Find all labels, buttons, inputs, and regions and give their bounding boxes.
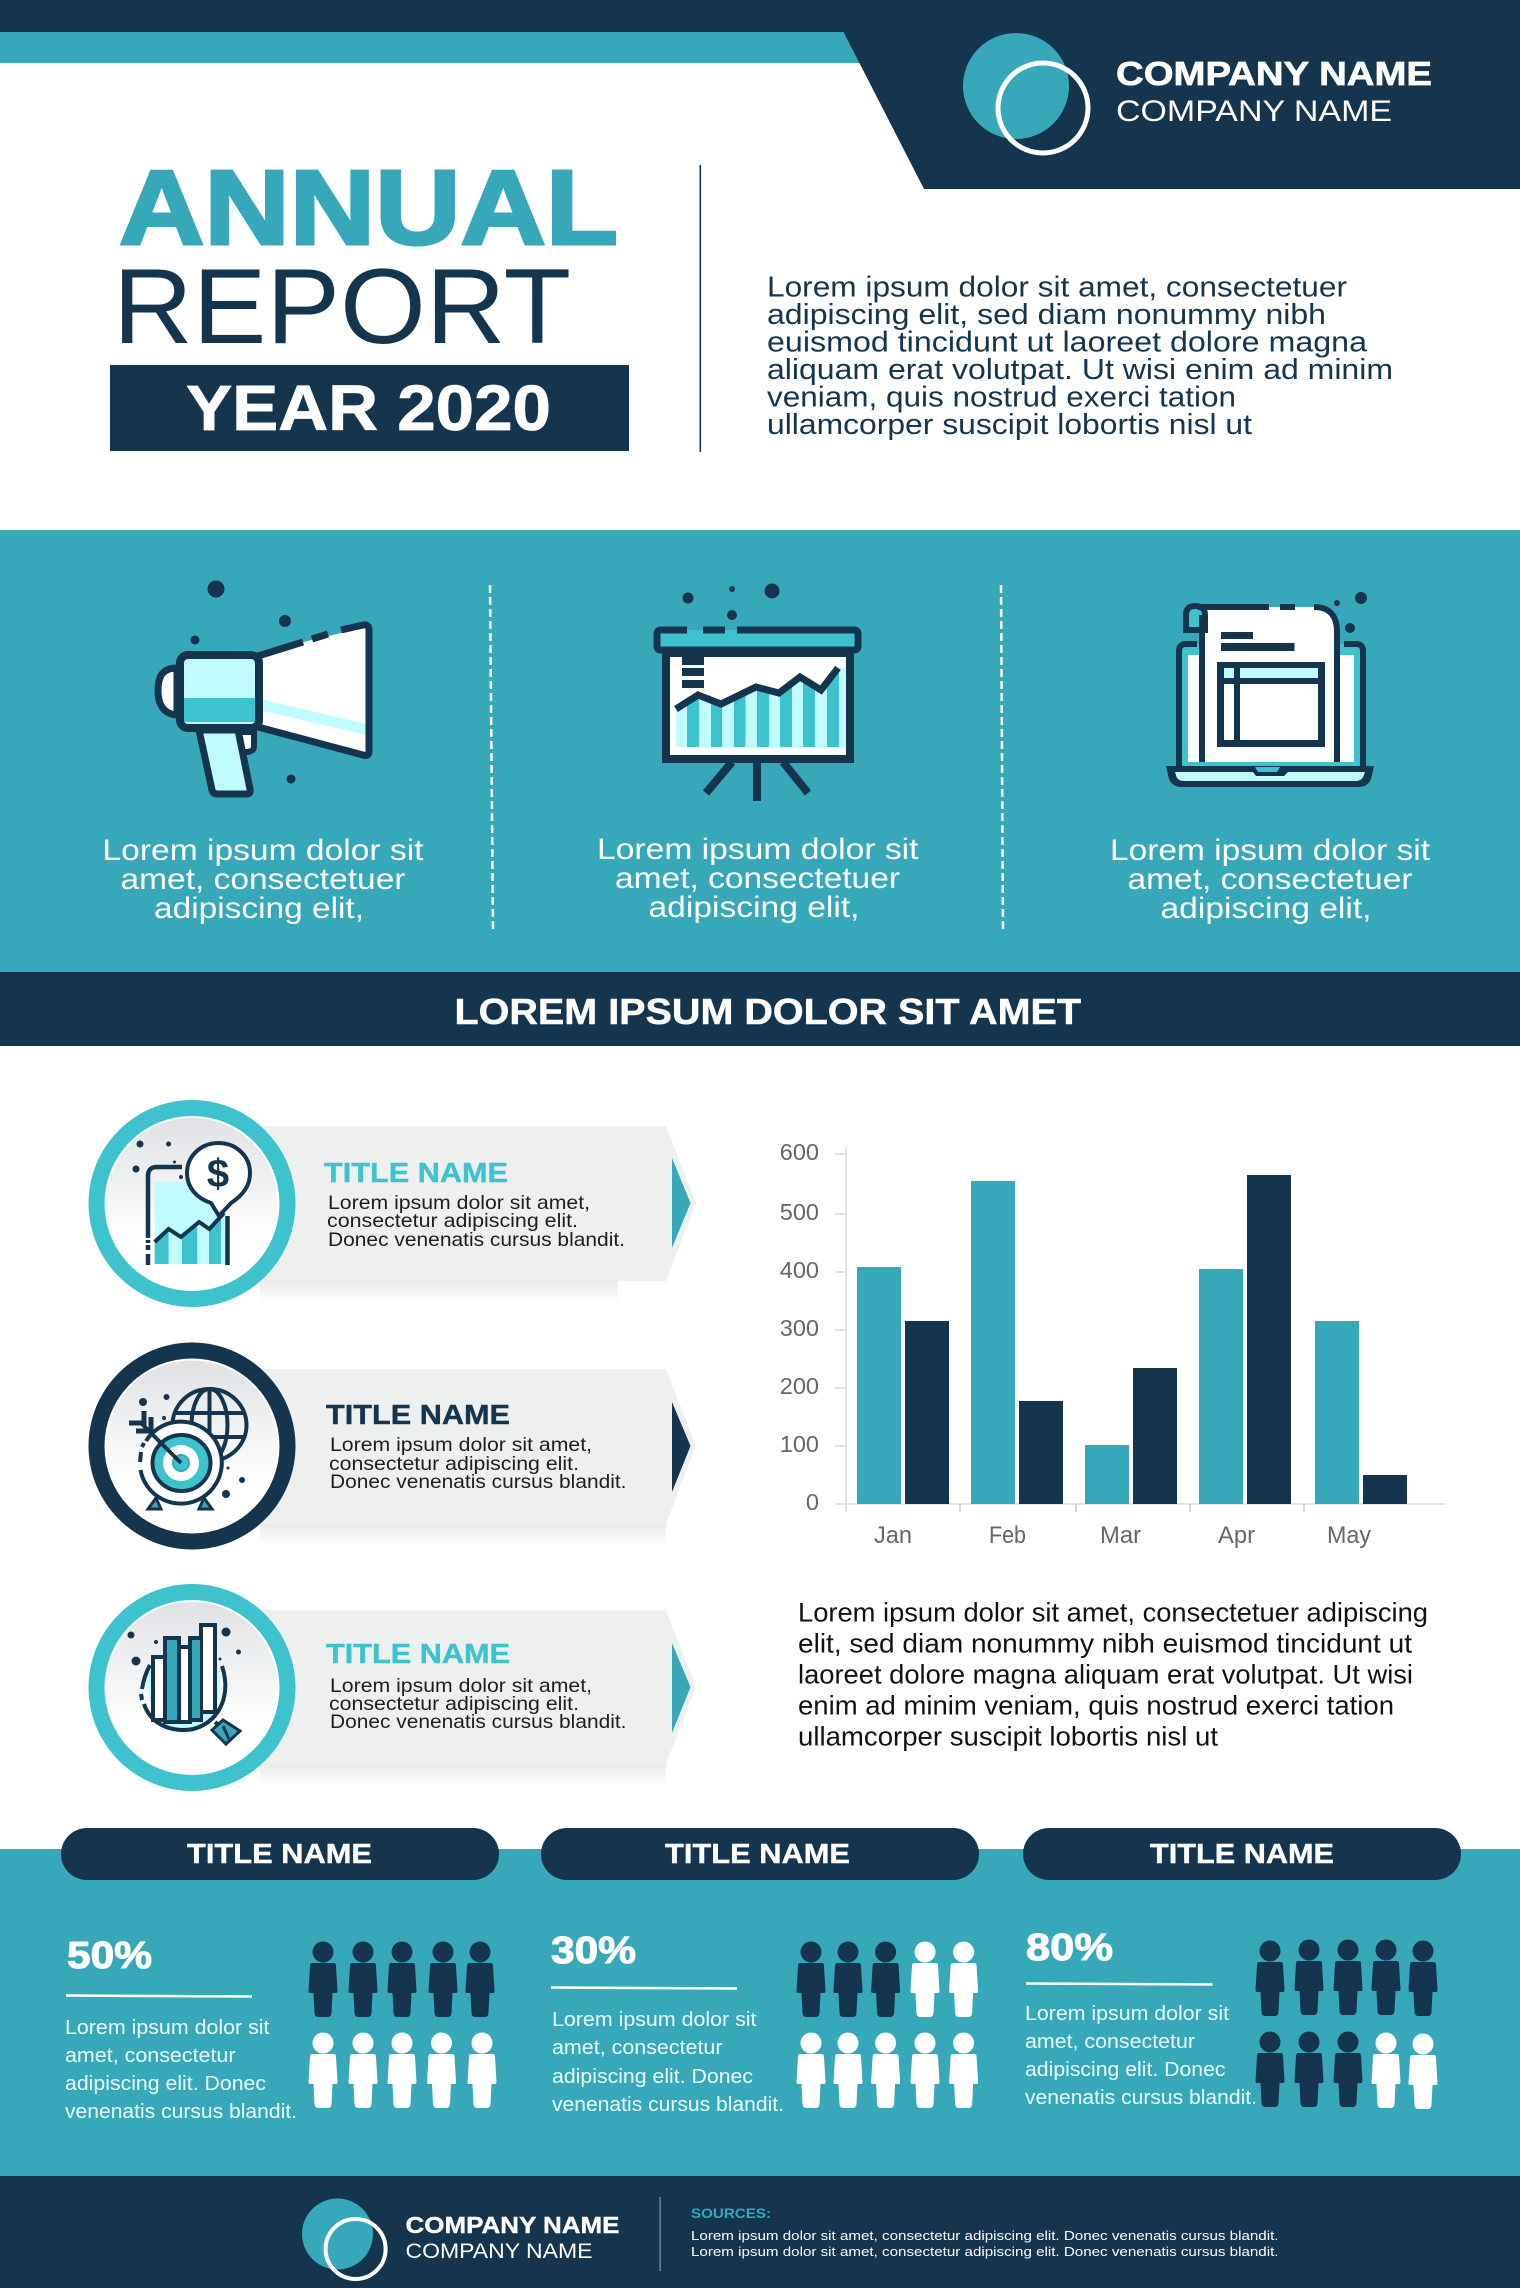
footer company name: COMPANY NAME xyxy=(406,2240,592,2263)
stat column 2: Lorem ipsum dolor sit xyxy=(552,2009,757,2031)
row 3 text: Lorem ipsum dolor sit amet, xyxy=(330,1675,592,1697)
stat column 1 xyxy=(61,1828,499,2123)
icon: company logo xyxy=(963,33,1088,153)
row 2 text: consectetur adipiscing elit. xyxy=(329,1453,579,1475)
stat column 1: venenatis cursus blandit. xyxy=(65,2101,297,2123)
row 3 text: TITLE NAME xyxy=(326,1638,510,1669)
feature captions xyxy=(102,833,1431,925)
feature captions: adipiscing elit, xyxy=(648,891,860,924)
section heading band: LOREM IPSUM DOLOR SIT AMET xyxy=(454,991,1081,1032)
title: YEAR 2020 xyxy=(186,372,551,444)
sources: SOURCES: xyxy=(691,2205,771,2221)
bar chart: 500 xyxy=(780,1199,819,1225)
icon: footer logo xyxy=(302,2198,386,2279)
stat column 3: adipiscing elit. Donec xyxy=(1025,2059,1226,2081)
title: ANNUAL xyxy=(119,149,618,267)
stat column 2: adipiscing elit. Donec xyxy=(552,2066,753,2088)
icon: target and globe xyxy=(129,1389,246,1509)
title xyxy=(110,149,629,451)
header banner xyxy=(0,0,1520,189)
stat column 2: venenatis cursus blandit. xyxy=(552,2094,784,2116)
stat column 3: venenatis cursus blandit. xyxy=(1025,2087,1257,2109)
icon: phone with dollar bubble: $ xyxy=(207,1152,229,1196)
feature captions: Lorem ipsum dolor sit xyxy=(102,834,424,867)
intro paragraph: veniam, quis nostrud exerci tation xyxy=(767,382,1236,414)
panel: row 2 xyxy=(88,1342,696,1550)
feature captions: adipiscing elit, xyxy=(154,892,364,925)
bar chart: May xyxy=(1327,1522,1371,1549)
intro paragraph: aliquam erat volutpat. Ut wisi enim ad minim xyxy=(767,354,1393,386)
feature captions: amet, consectetuer xyxy=(1128,863,1413,896)
row 2 text: Lorem ipsum dolor sit amet, xyxy=(330,1434,592,1456)
sources: Lorem ipsum dolor sit amet, consectetur adipiscing elit. Donec venenatis cursus blandit. xyxy=(691,2244,1278,2259)
stat column 1: Lorem ipsum dolor sit xyxy=(65,2017,270,2039)
icon: megaphone xyxy=(158,580,369,794)
feature captions: adipiscing elit, xyxy=(1160,892,1372,925)
row 3 text: consectetur adipiscing elit. xyxy=(329,1693,579,1715)
chart description paragraph: laoreet dolore magna aliquam erat volutpat. Ut wisi xyxy=(798,1660,1413,1690)
company name: COMPANY NAME xyxy=(1116,95,1392,128)
stat column 3: 80% xyxy=(1026,1927,1113,1969)
sources: Lorem ipsum dolor sit amet, consectetur adipiscing elit. Donec venenatis cursus blandit. xyxy=(691,2228,1278,2243)
stat column 2: TITLE NAME xyxy=(665,1838,850,1869)
footer company name xyxy=(406,2212,620,2263)
stat column 3: amet, consectetur xyxy=(1025,2031,1195,2053)
icon: presentation board xyxy=(657,584,858,801)
footer xyxy=(0,2176,1520,2288)
row 3 text xyxy=(326,1638,626,1733)
feature captions: amet, consectetuer xyxy=(615,862,900,895)
sources xyxy=(691,2205,1278,2259)
bar chart: 0 xyxy=(806,1489,819,1515)
stat column 3 xyxy=(1023,1828,1461,2109)
chart description paragraph: enim ad minim veniam, quis nostrud exerci tation xyxy=(798,1690,1394,1720)
panel: row 1 xyxy=(88,1100,696,1307)
icon: laptop with document xyxy=(1166,592,1374,787)
intro paragraph: Lorem ipsum dolor sit amet, consectetuer xyxy=(767,272,1347,304)
bar chart: 200 xyxy=(780,1373,819,1399)
stat column 1: TITLE NAME xyxy=(187,1838,372,1869)
stat column 1: amet, consectetur xyxy=(65,2045,236,2067)
footer company name: COMPANY NAME xyxy=(406,2212,620,2238)
feature captions: Lorem ipsum dolor sit xyxy=(1110,834,1431,867)
row 2 text: TITLE NAME xyxy=(326,1399,510,1430)
stat column 2: 30% xyxy=(551,1930,636,1972)
stat column 3: Lorem ipsum dolor sit xyxy=(1025,2003,1229,2025)
chart description paragraph xyxy=(798,1598,1428,1752)
bar chart: 100 xyxy=(780,1431,819,1457)
intro paragraph: adipiscing elit, sed diam nonummy nibh xyxy=(767,299,1326,331)
stat column 1: adipiscing elit. Donec xyxy=(65,2073,266,2095)
bar chart: 300 xyxy=(780,1315,819,1341)
row 1 text: TITLE NAME xyxy=(324,1157,508,1188)
row 1 text: consectetur adipiscing elit. xyxy=(327,1210,578,1232)
intro paragraph: euismod tincidunt ut laoreet dolore magna xyxy=(767,326,1368,358)
company name: COMPANY NAME xyxy=(1116,56,1432,93)
people pictogram 80% xyxy=(1256,1940,1438,2109)
stat column 2 xyxy=(541,1828,979,2116)
bar chart: Feb xyxy=(989,1522,1026,1549)
feature captions: amet, consectetuer xyxy=(120,863,406,896)
chart description paragraph: elit, sed diam nonummy nibh euismod tincidunt ut xyxy=(798,1628,1413,1658)
panel: row 3 xyxy=(88,1584,696,1791)
bar chart: Apr xyxy=(1218,1522,1255,1549)
stat column 2: amet, consectetur xyxy=(552,2037,723,2059)
row 1 text: Lorem ipsum dolor sit amet, xyxy=(328,1192,590,1214)
bar chart: Jan xyxy=(874,1522,912,1549)
bar chart: Mar xyxy=(1100,1522,1141,1549)
bar chart xyxy=(780,1139,1446,1549)
row 3 text: Donec venenatis cursus blandit. xyxy=(330,1711,626,1733)
company name xyxy=(1116,56,1432,128)
intro paragraph: ullamcorper suscipit lobortis nisl ut xyxy=(767,409,1252,441)
icon: magnifier with bars xyxy=(128,1625,241,1744)
bar chart: 600 xyxy=(780,1139,819,1165)
section heading band xyxy=(0,972,1520,1046)
row 1 text: Donec venenatis cursus blandit. xyxy=(328,1229,625,1251)
title: REPORT xyxy=(113,246,571,366)
people pictogram 30% xyxy=(796,1942,978,2108)
chart description paragraph: ullamcorper suscipit lobortis nisl ut xyxy=(798,1722,1219,1752)
intro paragraph xyxy=(767,272,1393,441)
row 2 text xyxy=(326,1399,626,1493)
panel: three feature icons xyxy=(0,530,1520,972)
stat column 3: TITLE NAME xyxy=(1150,1838,1334,1869)
feature captions: Lorem ipsum dolor sit xyxy=(597,833,919,866)
people pictogram 50% xyxy=(308,1942,496,2108)
icon: phone with dollar bubble xyxy=(132,1140,250,1265)
bar chart: 400 xyxy=(780,1257,819,1283)
stat column 1: 50% xyxy=(67,1935,152,1977)
chart description paragraph: Lorem ipsum dolor sit amet, consectetuer adipiscing xyxy=(798,1598,1428,1628)
row 1 text xyxy=(324,1157,625,1251)
row 2 text: Donec venenatis cursus blandit. xyxy=(330,1471,626,1493)
panel: statistics background xyxy=(0,1849,1520,2176)
